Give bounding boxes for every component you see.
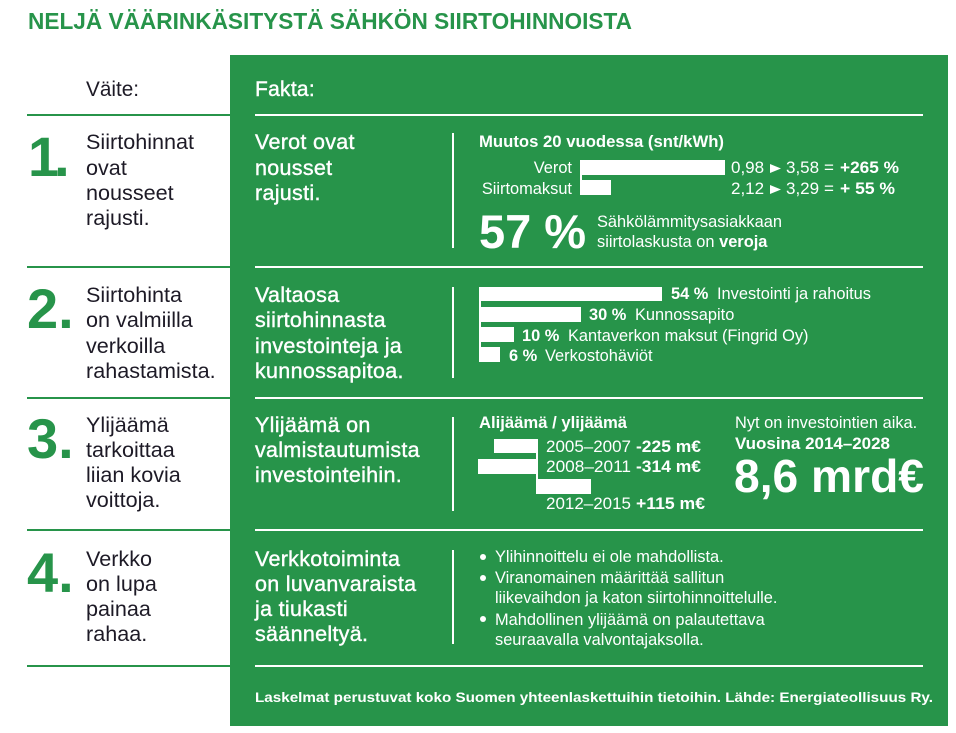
fact 3 chart: deficit and surplus: Alijäämä / ylijäämä: [479, 414, 628, 432]
fact 1 heading: Verot ovat: [255, 130, 355, 154]
fact 4 bullet list: Mahdollinen ylijäämä on palautettava: [495, 611, 766, 629]
number 3: 3.: [27, 407, 74, 470]
panel: facts background: [230, 55, 948, 726]
fact 1 heading: nousset: [255, 156, 332, 180]
claim 2 text: Siirtohinta: [86, 282, 183, 307]
fact 1 chart: change in 20 years: + 55 %: [840, 180, 895, 198]
fact 2 chart: cost breakdown: 6 %: [509, 347, 538, 365]
claim 3 text: tarkoittaa: [86, 437, 176, 462]
claim 3: [27, 407, 182, 512]
fact 1 chart: change in 20 years: =: [824, 158, 834, 177]
claim 1: [28, 125, 194, 230]
number 4: 4.: [27, 541, 74, 604]
fact 4 bullet list: [480, 548, 777, 649]
fact 3 heading: Ylijäämä on: [255, 413, 371, 437]
claim 1 text: rajusti.: [86, 205, 150, 230]
fact 3 chart: deficit and surplus: 2008–2011: [546, 458, 631, 476]
claim 4 text: painaa: [86, 596, 152, 621]
fact 3 chart: deficit and surplus: +115 m€: [636, 495, 705, 513]
fact 2 chart: cost breakdown: [479, 285, 871, 365]
fact 1 chart: change in 20 years: 3,29: [786, 179, 819, 198]
claim 3 text: Ylijäämä: [86, 412, 170, 437]
fact 2 chart: cost breakdown: 30 %: [589, 306, 627, 324]
fact 3 callout: Nyt on investointien aika.: [735, 414, 917, 432]
claim 4: [27, 541, 158, 646]
claim 2 text: on valmiilla: [86, 307, 194, 332]
fact 3 callout: Vuosina 2014–2028: [735, 435, 890, 453]
fact 1 note: Sähkölämmitysasiakkaan: [597, 213, 782, 231]
fact 3 heading: valmistautumista: [255, 438, 420, 462]
number 1: 1.: [28, 125, 66, 188]
fact 2 chart: cost breakdown: 10 %: [522, 327, 560, 345]
fact 3 chart: deficit and surplus: -225 m€: [636, 438, 701, 456]
fact 2 chart: cost breakdown: 54 %: [671, 285, 709, 303]
fact 2 chart: cost breakdown: Investointi ja rahoitus: [717, 285, 871, 303]
fact 1 chart: change in 20 years: =: [824, 179, 834, 198]
fact 1 chart: change in 20 years: 0,98: [731, 158, 764, 177]
fact 4 heading: Verkkotoiminta: [255, 547, 400, 571]
fact 3 chart: deficit and surplus: 2012–2015: [546, 495, 631, 513]
heading: fact column: Fakta:: [255, 77, 315, 101]
fact 4 heading: säänneltyä.: [255, 622, 368, 646]
claim 4 text: rahaa.: [86, 621, 147, 646]
fact 1 note: siirtolaskusta on veroja: [597, 233, 767, 251]
fact 2 chart: cost breakdown: Kantaverkon maksut (Fingrid Oy): [568, 327, 808, 345]
heading: claim column: Väite:: [86, 76, 139, 101]
fact 4 bullet list: seuraavalla valvontajaksolla.: [495, 631, 704, 649]
fact 1 chart: change in 20 years: +265 %: [840, 159, 899, 177]
claim 4 text: Verkko: [86, 546, 152, 571]
fact 4 bullet list: liikevaihdon ja katon siirtohinnoittelulle.: [495, 589, 777, 607]
claim 1 text: Siirtohinnat: [86, 129, 194, 154]
fact 1 heading: rajusti.: [255, 181, 321, 205]
claim 2 text: rahastamista.: [86, 358, 216, 383]
title: NELJÄ VÄÄRINKÄSITYSTÄ SÄHKÖN SIIRTOHINNOISTA: [28, 8, 632, 34]
fact 2 chart: cost breakdown: Verkostohäviöt: [545, 347, 653, 365]
fact 3 heading: investointeihin.: [255, 463, 402, 487]
fact 2 chart: cost breakdown: Kunnossapito: [635, 306, 734, 324]
fact 1 big number: 57 %: [479, 205, 586, 258]
fact 3 chart: deficit and surplus: 2005–2007: [546, 438, 631, 456]
fact 3 callout: 8,6 mrd€: [734, 450, 924, 502]
claim 2: [27, 277, 216, 383]
claim 1 text: nousseet: [86, 180, 174, 205]
claim 3 text: voittoja.: [86, 487, 160, 512]
fact 2 heading: kunnossapitoa.: [255, 359, 404, 383]
fact 1 chart: change in 20 years: Muutos 20 vuodessa (snt/kWh): [479, 132, 724, 151]
fact 3 chart: deficit and surplus: [478, 414, 705, 513]
fact 2 heading: Valtaosa: [255, 283, 339, 307]
number 2: 2.: [27, 277, 74, 340]
fact 4 heading: on luvanvaraista: [255, 572, 416, 596]
fact 3 chart: deficit and surplus: -314 m€: [636, 458, 701, 476]
claim 4 text: on lupa: [86, 571, 158, 596]
footer source note: Laskelmat perustuvat koko Suomen yhteenlaskettuihin tietoihin. Lähde: Energiateollisuus Ry.: [255, 689, 933, 705]
fact 4 bullet list: Viranomainen määrittää sallitun: [495, 569, 724, 587]
fact 2 heading: investointeja ja: [255, 334, 402, 358]
fact 1 chart: change in 20 years: 2,12: [731, 179, 764, 198]
fact 1 chart: change in 20 years: Siirtomaksut: [482, 180, 572, 198]
fact 3 callout: [734, 414, 924, 502]
fact 4 bullet list: Ylihinnoittelu ei ole mahdollista.: [495, 548, 724, 566]
fact 1 chart: change in 20 years: Verot: [534, 159, 572, 177]
fact 1 chart: change in 20 years: 3,58: [786, 158, 819, 177]
claim 1 text: ovat: [86, 155, 127, 180]
fact 2 heading: siirtohinnasta: [255, 308, 386, 332]
claim 3 text: liian kovia: [86, 462, 182, 487]
fact 1 chart: change in 20 years: [479, 132, 899, 198]
claim 2 text: verkoilla: [86, 333, 166, 358]
fact 4 heading: ja tiukasti: [254, 597, 348, 621]
